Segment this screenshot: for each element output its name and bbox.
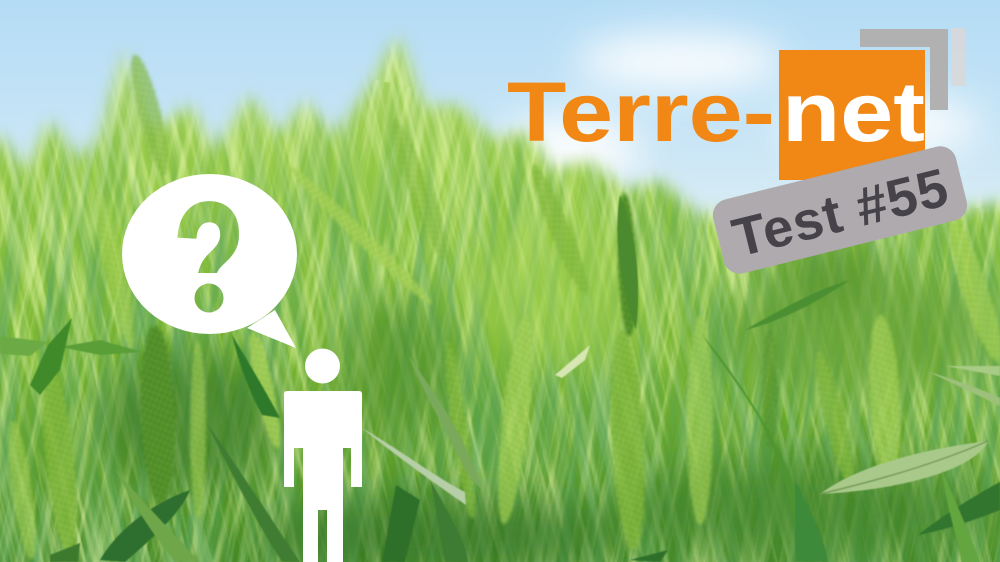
person body: [284, 391, 362, 562]
field tonal blobs: [100, 210, 1000, 562]
leaves: [0, 195, 1000, 562]
logo word net: net: [782, 65, 925, 159]
logo grey corner: [860, 29, 948, 110]
logo grey corner, light bar: [951, 28, 965, 86]
badge background: [710, 143, 970, 277]
logo word Terre-: Terre-: [507, 65, 775, 159]
person head: [305, 348, 340, 384]
icon: person silhouette: [284, 348, 362, 562]
badge: Test #55: [710, 143, 970, 277]
icon: question speech bubble: [122, 174, 297, 348]
bubble tail: [247, 310, 296, 348]
logo: Terre-net: [507, 28, 965, 180]
background: white cloud: [500, 34, 980, 185]
badge label: Test #55: [727, 157, 955, 269]
bubble body with question mark cutout: [122, 174, 297, 334]
logo orange square: [779, 50, 925, 180]
